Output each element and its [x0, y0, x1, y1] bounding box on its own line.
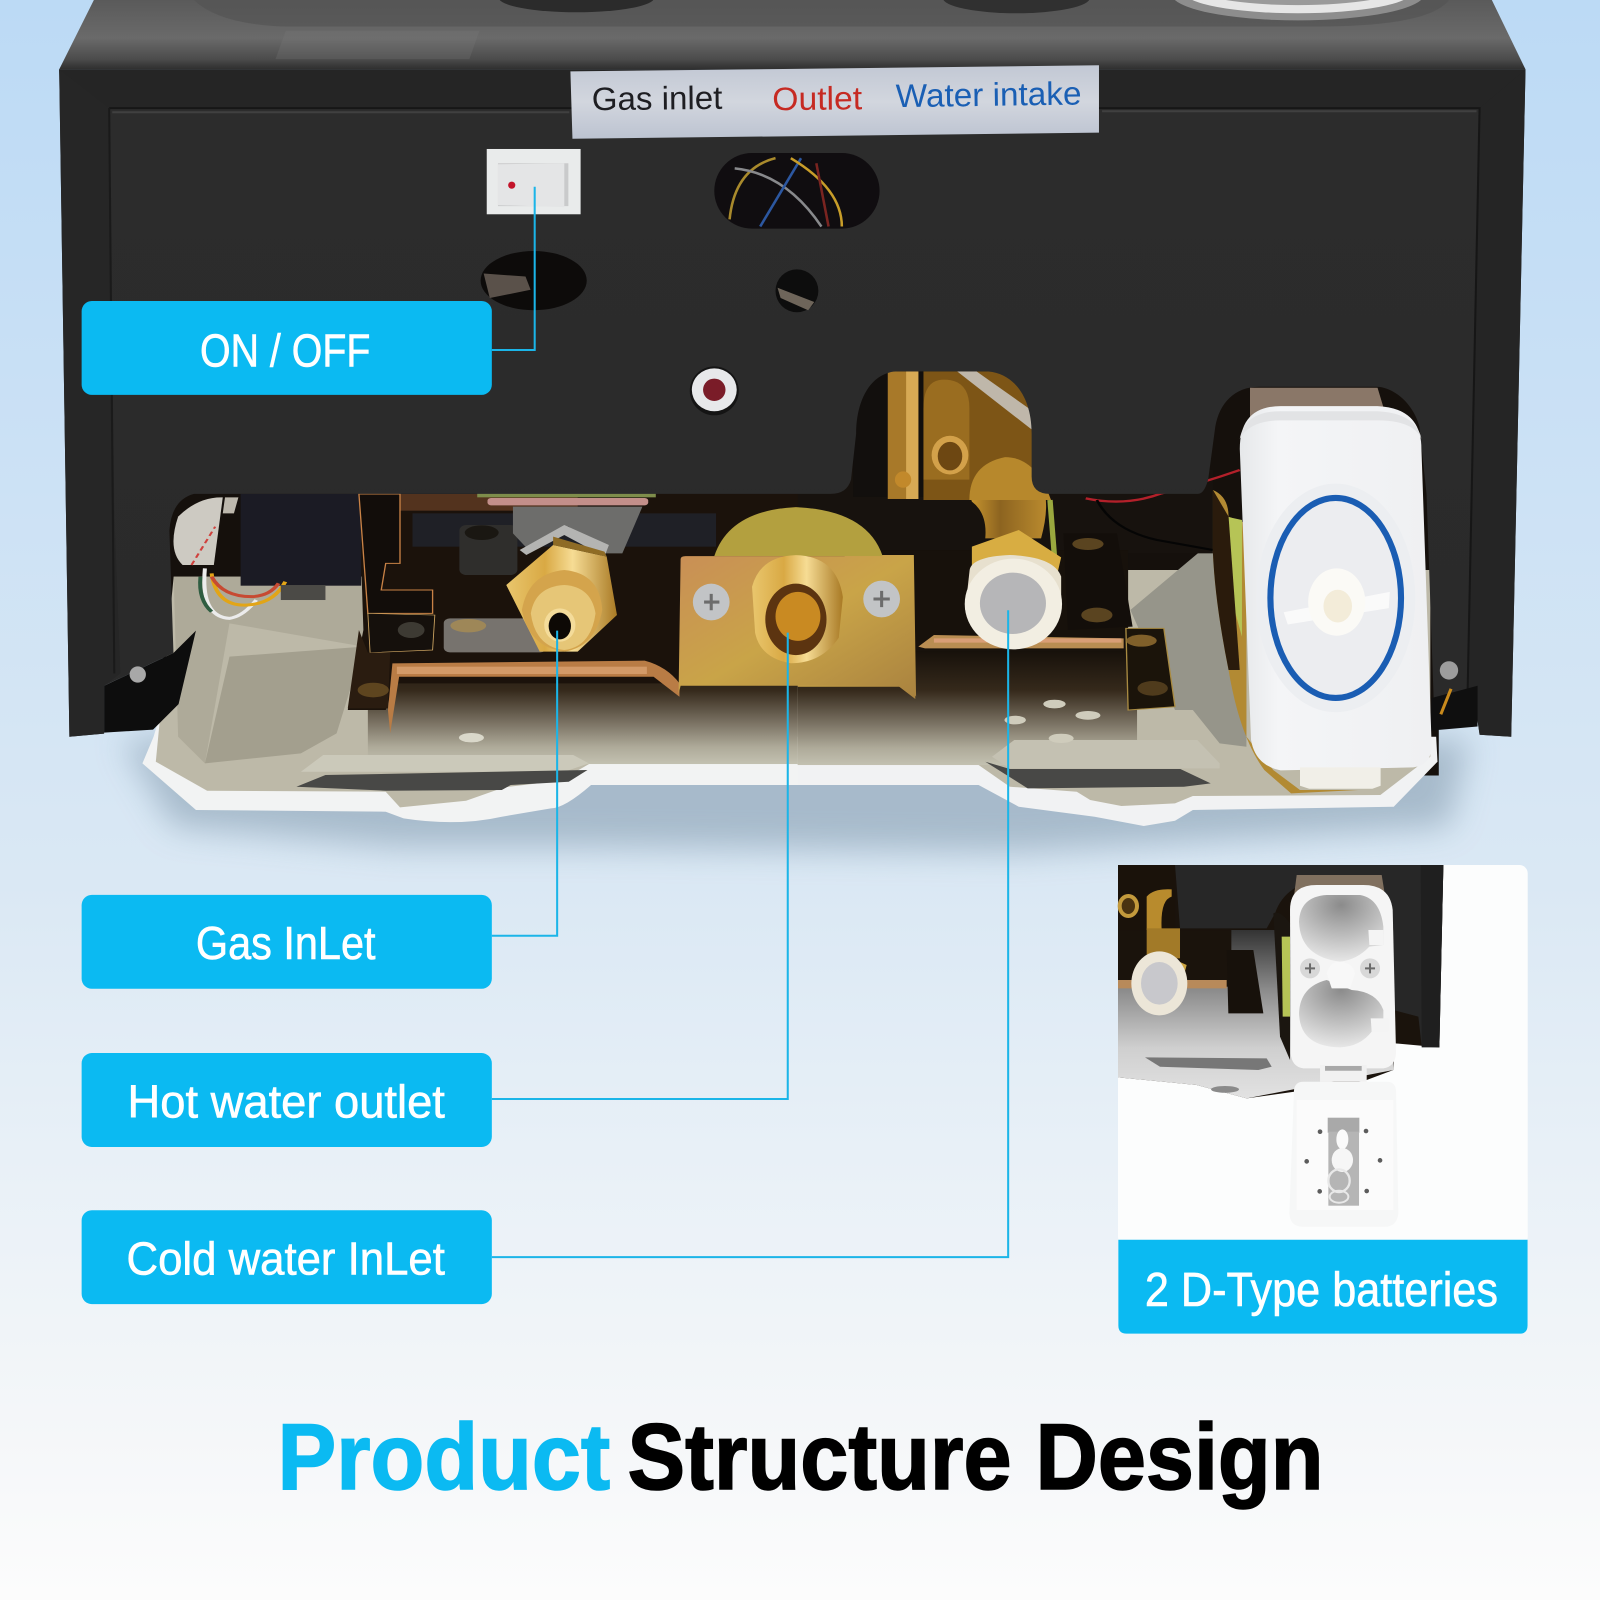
tray: right section: [798, 470, 1438, 826]
floor shadow under heater: [122, 740, 1469, 852]
sticker text: outlet: Outlet: [772, 79, 862, 117]
white tray lip: [142, 670, 800, 822]
blue oval ring: [1270, 498, 1401, 698]
gas fitting flange: [520, 525, 609, 557]
dark block behind: [459, 525, 517, 575]
black mounting plates: [1063, 533, 1133, 630]
callout: Hot water outlet: [82, 1053, 492, 1147]
water heater product photo illustration: [59, 0, 1526, 826]
gas inlet fitting: [506, 537, 617, 652]
copper vertical plate: [359, 494, 433, 613]
small hole: [776, 269, 818, 312]
callout: Cold water InLet: Cold water InLet: [127, 1232, 445, 1284]
on/off rocker switch: [487, 149, 581, 214]
floor slot: [296, 770, 588, 791]
tray: left and centre section: [142, 493, 800, 822]
open battery lid: [1289, 1082, 1398, 1227]
indicator light: [690, 366, 739, 415]
battery box closed: [1240, 406, 1432, 789]
floor shaded area: [368, 650, 800, 764]
callout: ON / OFF: [82, 301, 492, 395]
gas hole: [481, 251, 587, 310]
dimple: [459, 733, 484, 742]
cold water inlet fitting: [965, 530, 1062, 649]
wing knob: [1284, 568, 1390, 636]
black corner bracket left: [104, 631, 196, 733]
bundled wires: [200, 568, 285, 618]
title: Product: [278, 1404, 610, 1509]
silver band above battery box: [1250, 388, 1390, 429]
inset panel: battery compartment: [1118, 865, 1528, 1334]
callout: Gas InLet: Gas InLet: [196, 917, 376, 969]
top face of heater: [59, 0, 1526, 69]
inset photo: [1118, 865, 1528, 1245]
brass strip behind battery box: [1213, 490, 1358, 793]
callout leader lines: [492, 187, 1008, 1257]
dimples: [1004, 700, 1100, 743]
leader: gas inlet: [492, 631, 557, 936]
mid bracket right part: [798, 507, 876, 553]
callout: Gas InLet: [82, 895, 492, 989]
brass valve body in upper notch: [853, 369, 1051, 500]
inset cold fitting: [1137, 952, 1187, 983]
copper shelf bracket: [388, 661, 679, 733]
leader: on/off: [492, 187, 535, 350]
open battery housing: [1290, 885, 1396, 1068]
panel frame edges: [59, 69, 1526, 108]
black bracket with screws: [368, 613, 435, 653]
brass pipe to cold inlet: [970, 470, 1046, 538]
callout: Cold water InLet: [82, 1210, 492, 1304]
lid tab: [1300, 767, 1381, 789]
floor slot right: [985, 762, 1211, 788]
raised floor bump: [301, 755, 589, 772]
metal shelf: [918, 635, 1124, 648]
leader: hot water outlet: [492, 633, 788, 1099]
cream tray floor: [156, 577, 800, 807]
hot water outlet bracket: [679, 507, 915, 699]
inset caption text: 2 D-Type batteries: [1145, 1264, 1498, 1317]
white tray lip right: [798, 737, 1438, 826]
black corner bracket right with screw: [1431, 661, 1478, 731]
title: Structure Design: [628, 1404, 1323, 1509]
callout: Hot water outlet: Hot water outlet: [128, 1075, 445, 1127]
hinge: [1320, 1065, 1367, 1082]
sticker label: [570, 65, 1099, 139]
leader: cold water inlet: [492, 610, 1008, 1257]
sticker text: water intake: Water intake: [895, 75, 1082, 114]
wire opening: [714, 153, 880, 229]
braided sleeve: [173, 497, 223, 565]
raised floor right: [992, 740, 1220, 768]
callout: ON / OFF: ON / OFF: [200, 324, 370, 376]
inset caption bar: [1118, 1240, 1528, 1334]
left tray recess: [205, 647, 363, 763]
black component block: [241, 494, 361, 586]
dark interior behind gas fitting: [348, 494, 800, 710]
interior backdrop: [163, 367, 1439, 776]
grey mounting tab: [444, 618, 546, 652]
sticker text: gas inlet: Gas inlet: [592, 79, 723, 117]
lid contact plate: [1328, 1118, 1359, 1133]
red and black wires: [1086, 470, 1240, 502]
inset tray plate: [1145, 1057, 1272, 1070]
floor shading right: [798, 650, 1137, 765]
cream tray floor right: [798, 570, 1430, 806]
valve top plates: [477, 493, 656, 497]
wire tray metal bit: [281, 585, 325, 600]
heater front panel: [59, 69, 1526, 737]
